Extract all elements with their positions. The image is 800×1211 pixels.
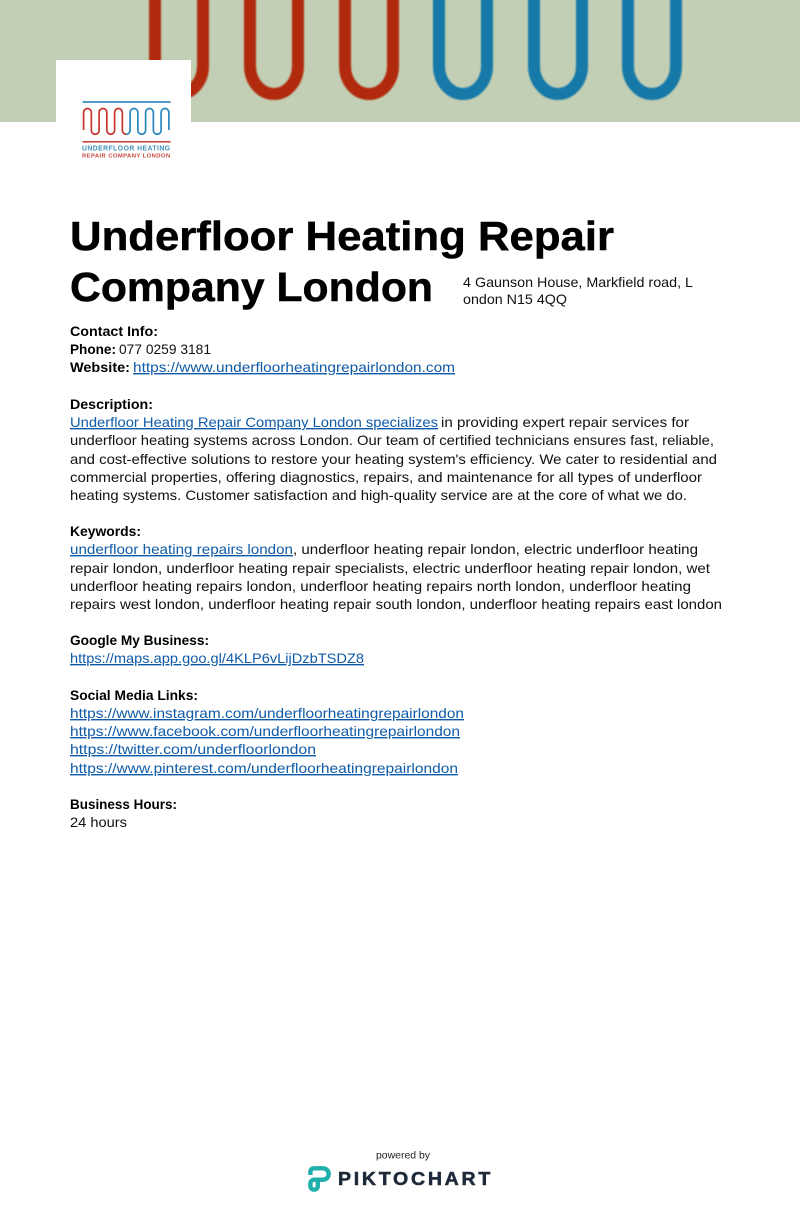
piktochart footer xyxy=(310,1150,493,1190)
logo card: REPAIR COMPANY LONDON xyxy=(82,154,170,160)
title xyxy=(70,213,614,310)
contact info: Contact Info: xyxy=(70,323,158,339)
keywords xyxy=(70,523,722,612)
contact info: https://www.underfloorheatingrepairlondon.com xyxy=(133,359,455,375)
business hours xyxy=(70,796,177,830)
keywords: repairs west london, underfloor heating repair south london, underfloor heating repairs east london xyxy=(70,596,722,612)
address xyxy=(463,274,693,307)
title: Company London xyxy=(70,264,433,310)
description: Underfloor Heating Repair Company London specializes xyxy=(70,414,438,430)
description: underfloor heating systems across London. Our team of certified technicians ensures fast, reliable, xyxy=(70,432,714,448)
google my business xyxy=(70,632,364,666)
description: and cost-effective solutions to restore your heating system's efficiency. We cater to residential and xyxy=(70,451,717,467)
address: 4 Gaunson House, Markfield road, L xyxy=(463,274,693,290)
business hours: 24 hours xyxy=(70,814,127,830)
keywords: repair london, underfloor heating repair specialists, electric underfloor heating repair london, wet xyxy=(70,560,710,576)
description: commercial properties, offering diagnostics, repairs, and maintenance for all types of underfloor xyxy=(70,469,702,485)
logo card: UNDERFLOOR HEATING xyxy=(82,144,170,152)
contact info: 077 0259 3181 xyxy=(119,341,211,357)
keywords: underfloor heating repairs london, underfloor heating repairs north london, underfloor heating xyxy=(70,578,691,594)
social media links: https://www.pinterest.com/underfloorheatingrepairlondon xyxy=(70,760,458,776)
social media links: https://twitter.com/underfloorlondon xyxy=(70,741,316,757)
keywords: underfloor heating repairs london xyxy=(70,541,293,557)
piktochart footer: powered by xyxy=(376,1150,431,1162)
address: ondon N15 4QQ xyxy=(463,291,567,307)
description xyxy=(70,396,717,503)
piktochart footer: PIKTOCHART xyxy=(338,1169,493,1189)
description: Description: xyxy=(70,396,153,412)
google my business: Google My Business: xyxy=(70,632,209,648)
social media links: https://www.instagram.com/underfloorheatingrepairlondon xyxy=(70,705,464,721)
social media links: Social Media Links: xyxy=(70,687,198,703)
title: Underfloor Heating Repair xyxy=(70,213,614,259)
description: heating systems. Customer satisfaction and high-quality service are at the core of what we do. xyxy=(70,487,687,503)
banner: underfloor heating pipes xyxy=(0,0,800,122)
contact info: Website: xyxy=(70,359,130,375)
keywords: , underfloor heating repair london, electric underfloor heating xyxy=(293,541,698,557)
social media links xyxy=(70,687,464,776)
contact info xyxy=(70,323,455,375)
social media links: https://www.facebook.com/underfloorheatingrepairlondon xyxy=(70,723,460,739)
logo card xyxy=(56,60,191,170)
business hours: Business Hours: xyxy=(70,796,177,812)
keywords: Keywords: xyxy=(70,523,141,539)
google my business: https://maps.app.goo.gl/4KLP6vLijDzbTSDZ8 xyxy=(70,650,364,666)
contact info: Phone: xyxy=(70,341,116,357)
description: in providing expert repair services for xyxy=(441,414,689,430)
